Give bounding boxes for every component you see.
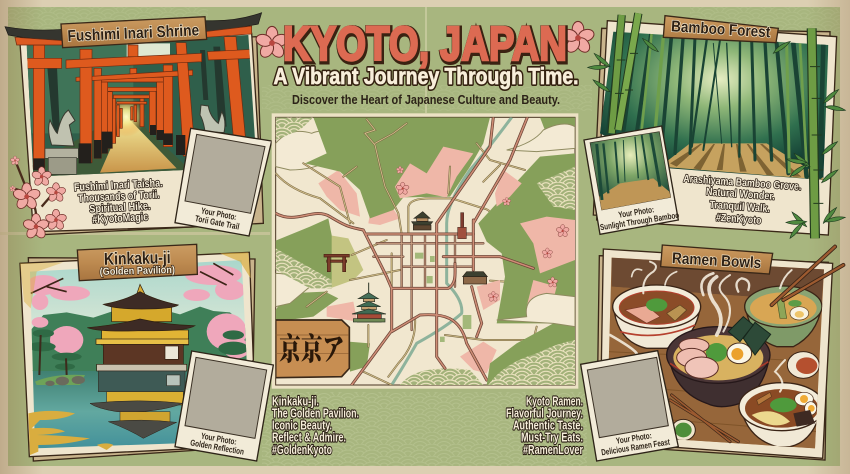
panel: map of Kyoto — [272, 113, 578, 389]
caption: Kyoto Ramen: Must-Try Eats. — [521, 430, 583, 444]
map: thin roads — [276, 119, 553, 385]
pavilion — [87, 284, 195, 371]
polaroid — [584, 126, 680, 234]
map: cream base — [276, 117, 575, 385]
polaroid: Your Photo: — [615, 430, 653, 446]
panel: Bamboo Forest — [584, 13, 846, 239]
icon: tower — [458, 213, 466, 239]
panel: Fushimi Inari Shrine — [5, 13, 272, 240]
fox statue left — [45, 110, 78, 174]
icon: left sakura — [254, 26, 290, 60]
polaroid: Your Photo: — [200, 205, 238, 222]
map: olive field — [328, 235, 363, 288]
chopsticks: table — [670, 395, 738, 442]
pink trees — [32, 313, 250, 358]
caption — [74, 177, 163, 226]
polaroid: Your Photo: — [200, 431, 238, 447]
polaroid — [175, 128, 272, 236]
map: green hill top right — [540, 118, 575, 129]
map: parks — [415, 253, 471, 342]
caption: Kinkaku-ji: Iconic Beauty. — [272, 418, 332, 432]
side dish — [787, 352, 819, 378]
caption: Kyoto Ramen: Authentic Taste. — [513, 418, 583, 432]
card: torii photo — [20, 33, 263, 235]
bowl: centre — [667, 317, 771, 407]
polaroid: Your Photo: — [618, 204, 655, 220]
plank: title: Kinkaku-ji — [104, 247, 171, 269]
caption — [683, 173, 802, 227]
tree band — [27, 307, 250, 371]
map: main roads — [276, 117, 493, 385]
bamboo stalks — [612, 13, 823, 238]
bowl: top right — [745, 286, 822, 347]
torii red beam — [15, 26, 252, 45]
cherry blossoms — [9, 156, 67, 240]
chopsticks: bowl — [772, 247, 843, 305]
plank: title: Fushimi Inari Shrine — [67, 22, 200, 45]
map: grid roads — [373, 234, 483, 330]
polaroid — [175, 351, 273, 461]
card: bamboo photo — [593, 21, 837, 235]
icon: building — [463, 272, 487, 284]
caption: #KyotoMagic — [92, 211, 149, 226]
map: green hill lower left — [276, 292, 338, 322]
plank: title — [77, 244, 197, 281]
map: green hill left — [276, 218, 332, 288]
illustration: golden pavilion — [27, 258, 250, 453]
icon: temple — [412, 212, 433, 230]
wood sign — [276, 320, 349, 378]
illustration: ramen table — [607, 258, 824, 448]
polaroid: Torii Gate Trail — [194, 213, 240, 232]
polaroid: Delicious Ramen Feast — [601, 437, 671, 457]
caption: Arashiyama Bamboo Grove. — [683, 173, 802, 193]
panel: Ramen Bowls — [581, 245, 843, 461]
reflection — [90, 371, 185, 438]
upper blossoms — [27, 265, 245, 310]
map: clouds right — [497, 293, 575, 327]
title: Kyoto, Japan: KYOTO, JAPAN — [284, 20, 568, 72]
caption: Kinkaku-ji: The Golden Pavilion. — [272, 406, 359, 420]
tagline: Discover the Heart of Japanese Culture and Beauty. — [292, 92, 560, 107]
caption: Kyoto Ramen: #RamenLover — [523, 443, 583, 457]
panel: Kinkaku-ji — [20, 244, 273, 461]
caption: Kinkaku-ji: #GoldenKyoto — [272, 443, 332, 457]
caption: #ZenKyoto — [716, 212, 762, 227]
plank: title: (Golden Pavilion) — [100, 265, 175, 278]
illustration: torii tunnel — [26, 35, 255, 176]
caption: Kinkaku-ji — [272, 394, 359, 457]
map: river — [392, 117, 512, 385]
caption: Kinkaku-ji: Kinkaku-ji. — [272, 394, 319, 408]
caption: Kyoto Ramen: Kyoto Ramen. — [526, 394, 583, 408]
caption: Fushimi Inari Taisha. — [74, 177, 163, 194]
icon: torii — [324, 254, 349, 272]
fox statue right — [200, 105, 225, 133]
map: blossoms on top hill — [395, 147, 473, 198]
pine trees — [28, 329, 248, 370]
bowl: bottom right — [739, 383, 824, 447]
map: sakura marks — [396, 166, 570, 302]
illustration: bamboo grove — [597, 30, 833, 183]
caption: Kinkaku-ji: Reflect & Admire. — [272, 430, 346, 444]
caption: Kyoto Ramen — [506, 394, 583, 457]
polaroid: Sunlight Through Bamboo — [599, 210, 680, 232]
map: green hill top — [305, 117, 490, 218]
map: green hill right — [478, 153, 575, 385]
caption: Tranquil Walk. — [709, 199, 770, 215]
map: wave patterns right — [488, 167, 575, 385]
subtitle: A Vibrant Journey Through Time. — [274, 63, 578, 89]
torii top beam — [5, 13, 262, 41]
wood sign: 京京ア — [279, 325, 344, 369]
card: pavilion photo — [20, 252, 255, 461]
card: ramen photo — [597, 249, 833, 460]
map: green hill bottom — [348, 342, 370, 372]
map: blossoms on right hill — [477, 170, 575, 310]
map: clouds — [276, 124, 575, 307]
caption: Kyoto Ramen: Flavorful Journey. — [506, 406, 583, 420]
caption: Natural Wonder. — [706, 186, 775, 203]
plank: title — [661, 245, 773, 274]
caption: Thousands of Torii. — [78, 189, 160, 205]
plank: title: Ramen Bowls — [672, 250, 762, 272]
polaroid: Golden Reflection — [190, 437, 245, 457]
subtitle: A Vibrant Journey Through Time. — [274, 63, 578, 89]
steam — [610, 262, 792, 392]
bowl: top left — [613, 285, 701, 348]
map: wave patterns left — [276, 117, 483, 385]
side dish greens — [671, 419, 695, 441]
plank: title: Bamboo Forest — [671, 18, 771, 41]
polaroid — [581, 351, 678, 461]
gold foil — [20, 252, 251, 455]
caption: Spiritual Hike. — [89, 200, 151, 216]
icon: pagoda — [352, 283, 386, 322]
icon: right sakura — [560, 21, 596, 55]
title: Kyoto, Japan: KYOTO, JAPAN — [283, 18, 567, 71]
map: east roads — [443, 117, 533, 337]
bamboo leaves — [588, 37, 846, 239]
map: blossom areas — [318, 171, 496, 374]
plank: title — [61, 17, 207, 48]
